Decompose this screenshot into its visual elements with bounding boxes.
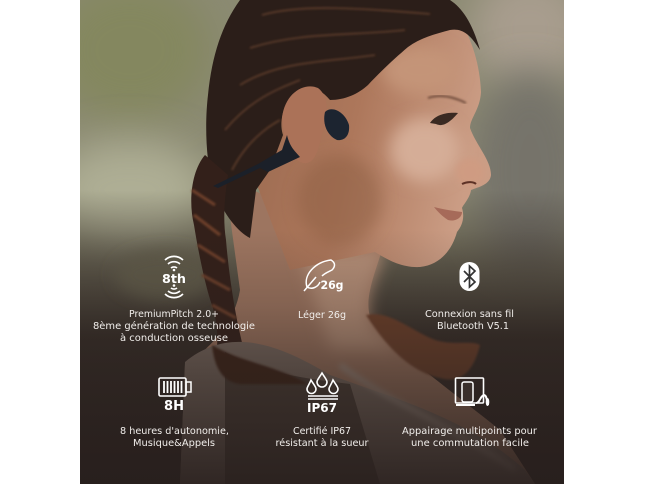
photo panel <box>80 0 564 484</box>
text: music and calls: Musique&Appels <box>133 438 215 449</box>
text: 8th generation: 8ème génération de technologie <box>93 321 255 332</box>
feature: Bluetooth <box>425 262 514 332</box>
icon: devices and headset <box>456 378 489 406</box>
text: IP67 certification: Certifié IP67 <box>293 426 351 437</box>
text: easy switching: une commutation facile <box>411 438 529 449</box>
woman: sports top <box>182 342 492 484</box>
blurred background <box>80 0 564 484</box>
woman: ear <box>282 86 323 134</box>
text: Bluetooth version: Bluetooth V5.1 <box>437 321 509 332</box>
text: bone conduction: à conduction osseuse <box>120 333 228 344</box>
feature: weight <box>298 260 346 321</box>
woman: hair <box>206 0 480 238</box>
text: PremiumPitch: PremiumPitch 2.0+ <box>129 309 219 320</box>
icon: 8th signal waves: 8th <box>162 271 186 286</box>
icon: feather 26g: 26g <box>320 278 344 292</box>
feature: IP67 <box>276 373 369 449</box>
text: battery life: 8 heures d'autonomie, <box>120 426 229 437</box>
icon: 8th signal waves <box>162 256 186 298</box>
icon: battery 8H: 8H <box>164 399 184 414</box>
feature: PremiumPitch <box>93 256 255 344</box>
feature: multipoint <box>402 378 537 449</box>
text: weight: Léger 26g <box>298 310 346 321</box>
woman: neck and shoulders <box>206 192 531 478</box>
icon: water drops IP67: IP67 <box>307 400 337 415</box>
woman: braid <box>190 155 242 345</box>
text: sweat resistant: résistant à la sueur <box>276 438 369 449</box>
headset <box>213 109 349 188</box>
woman: ponytail on shoulder <box>366 314 480 379</box>
text: multipoint pairing: Appairage multipoints pour <box>402 426 537 437</box>
dark bottom gradient <box>124 248 535 484</box>
text: wireless connection: Connexion sans fil <box>425 309 514 320</box>
feature: battery <box>120 378 229 449</box>
woman: face <box>255 10 491 270</box>
icon: Bluetooth <box>460 262 480 291</box>
